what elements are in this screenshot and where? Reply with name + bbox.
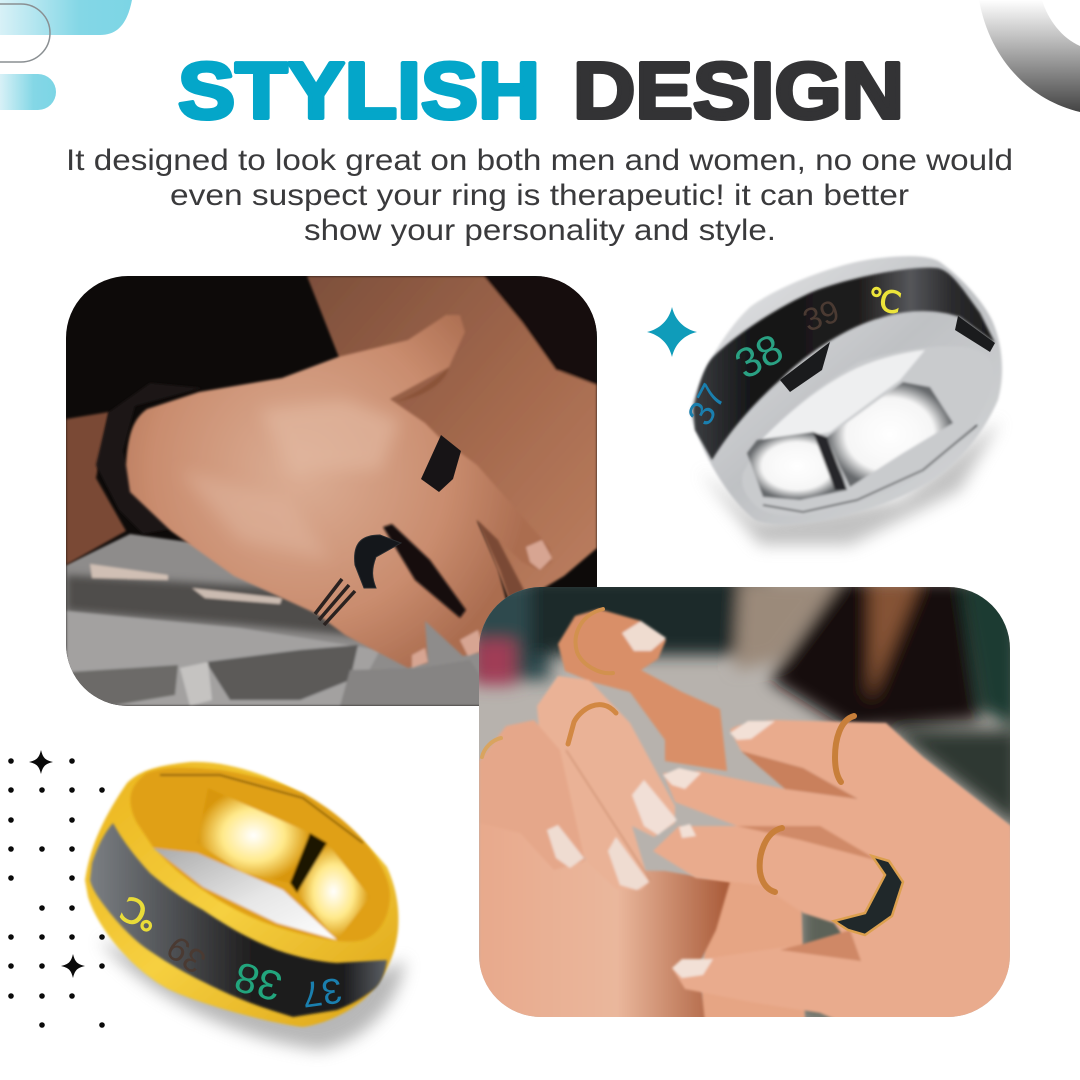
description text: even suspect your ring is therapeutic! it can better	[170, 179, 909, 212]
black display band	[693, 268, 995, 460]
back wrist	[702, 880, 806, 1017]
gold ring temperature digits: 39	[160, 928, 213, 981]
shadow gaps between fingers	[383, 524, 466, 618]
gold ring temperature digits: ℃	[115, 888, 166, 938]
gold ring interior	[130, 768, 390, 942]
woven leather bracelet	[96, 383, 202, 534]
ring temperature digits: 37	[679, 377, 734, 432]
gold ring temperature digits	[115, 888, 345, 1016]
product: gold temperature ring	[85, 762, 405, 1050]
decoration: top-left cyan bars	[0, 0, 132, 110]
fingernails	[622, 621, 666, 651]
gold ring shadow	[100, 940, 405, 1050]
gold ring temperature digits: 37	[299, 970, 345, 1016]
photo: woman's hands with rings	[470, 575, 1020, 1032]
gold ring temperature digits: 38	[229, 953, 287, 1011]
fingernails right	[730, 721, 775, 740]
forearm and fist at right	[307, 276, 597, 607]
ring temperature digits: 38	[727, 325, 790, 388]
gold ring black band	[90, 823, 387, 1017]
blurred background	[470, 575, 1020, 1020]
left wrist	[66, 412, 126, 565]
gold ring body	[85, 762, 398, 1027]
ring hole	[153, 848, 337, 940]
ring interior	[742, 346, 993, 516]
ring temperature digits: ℃	[865, 282, 904, 321]
hand and fingers	[126, 315, 552, 668]
photo: man's hand with black rings	[66, 276, 597, 706]
dark bevel accents	[780, 316, 995, 392]
description text: show your personality and style.	[304, 214, 776, 247]
ring temperature digits: 39	[798, 293, 844, 339]
concrete ledge	[66, 532, 479, 706]
mood ring on finger	[834, 856, 903, 935]
description text: It designed to look great on both men and women, no one would	[66, 144, 1013, 177]
gold rings on fingers	[482, 609, 854, 892]
title	[178, 46, 904, 135]
description text	[66, 144, 1013, 247]
product: silver temperature ring	[679, 256, 1002, 545]
title: DESIGN	[573, 46, 904, 135]
ring shadow	[700, 420, 1000, 545]
right hand	[653, 720, 1011, 1032]
icon: cyan star	[647, 307, 697, 357]
black rings on fingers	[315, 435, 461, 625]
decoration: dot grid with stars	[8, 750, 105, 1028]
ring body	[690, 256, 1002, 525]
decoration: top-right gray arc	[979, 0, 1080, 112]
left hand	[479, 609, 730, 1032]
title: STYLISH	[178, 46, 540, 135]
ring temperature digits	[679, 282, 904, 432]
